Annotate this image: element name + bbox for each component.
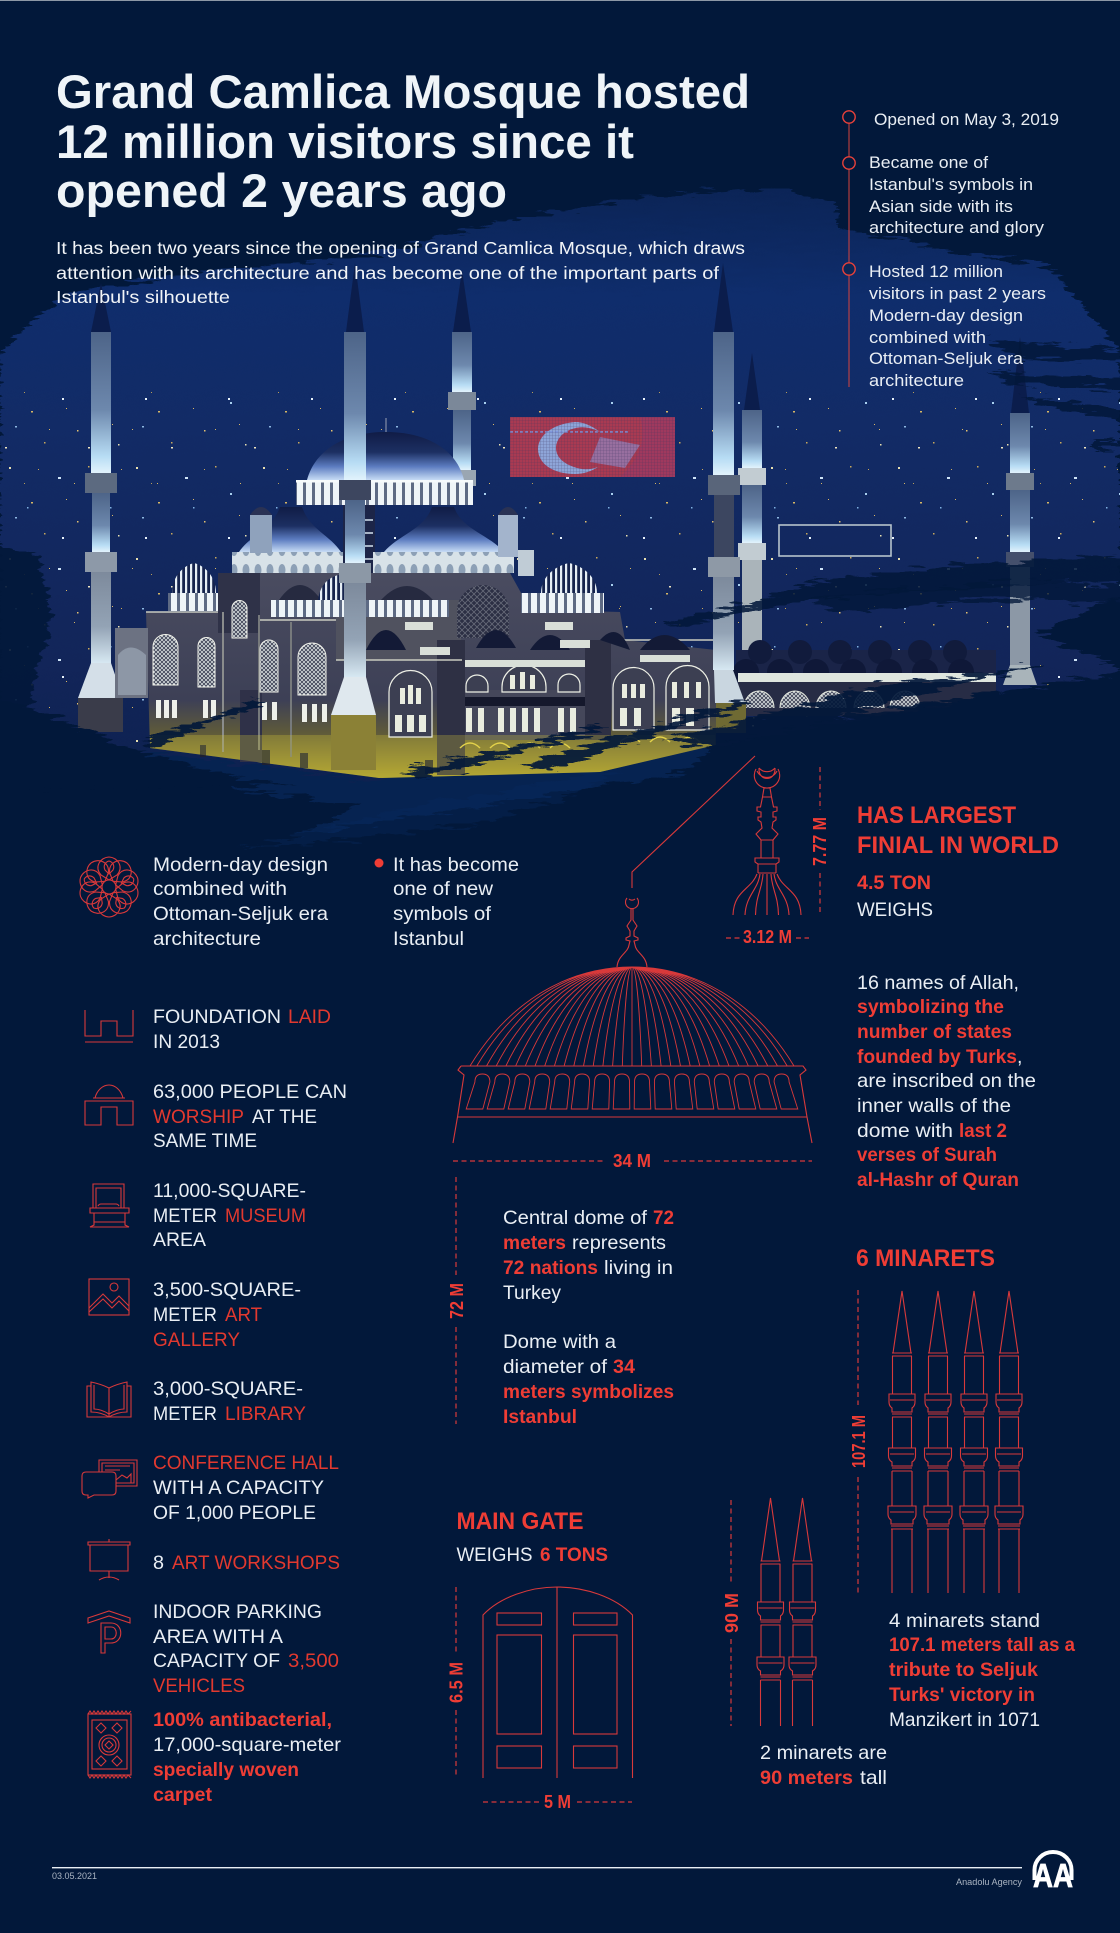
text: carpet: 17,000-square-meter <box>153 1734 342 1756</box>
text: library: 3,000-SQUARE- <box>153 1378 303 1400</box>
text: central dome meaning: 72 <box>653 1207 674 1229</box>
text: museum: 11,000-SQUARE- <box>153 1180 306 1202</box>
gate weight: 6 TONS <box>540 1544 608 1566</box>
timeline line and markers <box>843 111 855 387</box>
text: carpet <box>153 1709 342 1806</box>
bullet: new symbol of Istanbul: Istanbul <box>393 928 464 950</box>
text: four minarets: 107.1 meters tall as a <box>889 1634 1075 1656</box>
finial weight: 4.5 TON <box>857 872 931 894</box>
panel: main gate <box>446 1508 632 1812</box>
fact: symbol: Asian side with its <box>869 197 1013 216</box>
diagram: enlarged finial <box>733 768 801 915</box>
diagram: two minarets <box>757 1498 816 1726</box>
icon: foundation <box>85 1010 133 1042</box>
text: two minarets: 2 minarets are <box>760 1742 887 1764</box>
text: central dome meaning: Turkey <box>503 1282 561 1304</box>
finial weight: WEIGHS <box>857 899 933 921</box>
text: names of Allah: inner walls of the <box>857 1095 1011 1117</box>
central dome and drums <box>168 418 690 667</box>
heading: main gate: MAIN GATE <box>456 1508 584 1535</box>
text: art gallery: ART <box>225 1304 262 1326</box>
text: central dome meaning: Dome with a <box>503 1331 616 1353</box>
text: art gallery <box>153 1279 301 1351</box>
fact: symbol: architecture and glory <box>869 218 1045 237</box>
text: central dome meaning: 34 <box>613 1356 635 1378</box>
text: four minarets: Manzikert in 1071 <box>889 1709 1040 1731</box>
text: art gallery: METER <box>153 1304 217 1326</box>
dome finial <box>617 898 647 967</box>
text: names of Allah: number of states <box>857 1021 1012 1043</box>
dimension: 6.5 M: 6.5 M <box>446 1662 466 1703</box>
text: four minarets: Turks' victory in <box>889 1684 1035 1706</box>
text: four minarets: 4 minarets stand <box>889 1610 1040 1632</box>
front minarets <box>331 263 746 770</box>
dimension: 34 M: 34 M <box>613 1151 651 1171</box>
mosque main body <box>115 573 716 778</box>
text: design: combined with <box>153 878 287 900</box>
text: names of Allah: verses of Surah <box>857 1144 997 1166</box>
panel: largest finial text <box>857 802 1059 1191</box>
text: central dome meaning: meters symbolizes <box>503 1381 674 1403</box>
bullet: new symbol of Istanbul: symbols of <box>393 903 492 925</box>
text: names of Allah: al-Hashr of Quran <box>857 1169 1019 1191</box>
fact: visitors <box>869 262 1046 390</box>
drum windows <box>466 1074 798 1109</box>
dimension: 3.12 M <box>726 927 809 947</box>
text: worship <box>153 1081 347 1152</box>
text: names of Allah: 16 names of Allah, <box>857 972 1019 994</box>
text: names of Allah: last 2 <box>959 1120 1007 1142</box>
text: workshops: ART WORKSHOPS <box>172 1552 340 1574</box>
fact: symbol: Became one of <box>869 153 988 172</box>
text: foundation: LAID <box>288 1006 331 1028</box>
gate weight: WEIGHS <box>456 1544 532 1566</box>
text: names of Allah: are inscribed on the <box>857 1070 1036 1092</box>
dimension: 90 M: 90 M <box>722 1593 742 1633</box>
bullet: new symbol of Istanbul: It has become <box>393 854 519 876</box>
text: conference hall <box>153 1452 339 1524</box>
dimension: 72 M: 72 M <box>447 1283 467 1319</box>
text: central dome meaning: Istanbul <box>503 1406 577 1428</box>
icon: conference hall <box>82 1460 137 1498</box>
text: central dome meaning: diameter of <box>503 1356 608 1378</box>
text: four minarets <box>889 1610 1075 1731</box>
panel: left feature list <box>77 854 347 1806</box>
text: museum: AREA <box>153 1229 206 1251</box>
text: names of Allah: dome with <box>857 1120 953 1142</box>
title: opened 2 years ago <box>56 164 507 217</box>
fact: opened: Opened on May 3, 2019 <box>874 110 1059 129</box>
text: museum: METER <box>153 1205 217 1227</box>
text: central dome meaning: meters <box>503 1232 566 1254</box>
text: museum <box>153 1180 306 1251</box>
icon: art gallery <box>89 1279 129 1315</box>
dimension: 3.12 M: 3.12 M <box>743 927 792 947</box>
text: worship: AT THE <box>252 1106 317 1128</box>
Turkish flag display <box>510 417 675 477</box>
text: foundation: FOUNDATION <box>153 1006 281 1028</box>
fact: symbol: Istanbul's symbols in <box>869 175 1033 194</box>
text: design: Modern-day design <box>153 854 328 876</box>
finial weight <box>857 872 933 921</box>
logo: Anadolu Agency: AA <box>1033 1857 1073 1894</box>
fact: visitors: combined with <box>869 328 986 347</box>
text: library <box>153 1378 306 1425</box>
text: parking: CAPACITY OF <box>153 1650 280 1672</box>
text: names of Allah <box>857 972 1036 1191</box>
text: art gallery: 3,500-SQUARE- <box>153 1279 301 1301</box>
rear minarets <box>78 270 1037 732</box>
text: worship: SAME TIME <box>153 1130 257 1152</box>
arched facade windows <box>389 665 709 737</box>
heading: largest finial: FINIAL IN WORLD <box>857 832 1059 859</box>
text: central dome meaning: living in <box>604 1257 673 1279</box>
icon: projection screen <box>88 1539 130 1580</box>
text: library: METER <box>153 1403 217 1425</box>
top edge line <box>0 0 1120 1</box>
text: two minarets: tall <box>860 1767 887 1789</box>
title <box>56 65 750 217</box>
heading: 6 minarets: 6 MINARETS <box>856 1245 995 1272</box>
text: parking: VEHICLES <box>153 1675 245 1697</box>
arched lattice windows <box>153 585 509 722</box>
text: carpet: 100% antibacterial, <box>153 1709 332 1731</box>
icon: carpet <box>88 1711 131 1778</box>
icon: parking <box>88 1611 130 1653</box>
text: museum: MUSEUM <box>225 1205 306 1227</box>
dimension: 5 M: 5 M <box>544 1792 571 1812</box>
text: design: architecture <box>153 928 261 950</box>
text: foundation: IN 2013 <box>153 1031 220 1053</box>
text: two minarets: 90 meters <box>760 1767 853 1789</box>
text: carpet: carpet <box>153 1784 213 1806</box>
intro paragraph <box>56 238 745 307</box>
dome ribs <box>470 967 794 1066</box>
icon: worship <box>85 1085 133 1125</box>
heading: largest finial: HAS LARGEST <box>857 802 1016 829</box>
date: 03.05.2021 <box>52 1871 97 1881</box>
diagram: gate doors <box>483 1587 632 1778</box>
intro paragraph: attention with its architecture and has become one of the important parts of <box>56 263 719 283</box>
icon: rosette <box>77 856 141 918</box>
title: 12 million visitors since it <box>56 115 634 168</box>
text: central dome meaning: Central dome of <box>503 1207 648 1229</box>
text: parking <box>153 1601 339 1697</box>
footer rule <box>52 1867 1022 1868</box>
text: parking: 3,500 <box>288 1650 339 1672</box>
text: conference hall: OF 1,000 PEOPLE <box>153 1502 316 1524</box>
title: Grand Camlica Mosque hosted <box>56 65 750 118</box>
intro paragraph: Istanbul's silhouette <box>56 287 230 307</box>
fact: visitors: Hosted 12 million <box>869 262 1003 281</box>
diagram: four minarets <box>888 1291 1023 1593</box>
text: worship: 63,000 PEOPLE CAN <box>153 1081 347 1103</box>
text: names of Allah: symbolizing the <box>857 996 1004 1018</box>
text: four minarets: tribute to Seljuk <box>889 1659 1038 1681</box>
right arcade wing <box>733 640 996 716</box>
fact: visitors: Modern-day design <box>869 306 1023 325</box>
fact: visitors: architecture <box>869 371 964 390</box>
icon: library book <box>87 1382 131 1417</box>
text: conference hall: WITH A CAPACITY <box>153 1477 324 1499</box>
gate weight <box>456 1544 608 1566</box>
lit billboard outline <box>779 525 891 556</box>
source credit: Anadolu Agency <box>956 1877 1022 1888</box>
lit arcade windows <box>395 672 701 732</box>
footer <box>52 1852 1073 1894</box>
fact: symbol <box>869 153 1045 237</box>
text: names of Allah: founded by Turks <box>857 1046 1017 1068</box>
text: art gallery: GALLERY <box>153 1329 240 1351</box>
fact: visitors: visitors in past 2 years <box>869 284 1046 303</box>
diagram: central dome <box>453 898 812 1143</box>
text: parking: AREA WITH A <box>153 1626 283 1648</box>
text: central dome meaning: 72 nations <box>503 1257 598 1279</box>
text: two minarets <box>760 1742 887 1789</box>
text: carpet: specially woven <box>153 1759 299 1781</box>
text: parking: INDOOR PARKING <box>153 1601 322 1623</box>
dimension: 107.1 M: 107.1 M <box>849 1415 869 1468</box>
faded blue brush under the photo <box>90 715 760 850</box>
dome drum and base <box>453 1066 812 1143</box>
text: names of Allah: , <box>1017 1046 1022 1068</box>
bullet: new symbol of Istanbul: one of new <box>393 878 494 900</box>
icon: museum display <box>90 1184 129 1227</box>
text: worship: WORSHIP <box>153 1106 244 1128</box>
bullet: new symbol of Istanbul <box>374 854 519 950</box>
text: library: LIBRARY <box>225 1403 306 1425</box>
text: foundation <box>153 1006 331 1053</box>
text: central dome meaning: represents <box>572 1232 666 1254</box>
dark brush strokes over photo <box>0 340 1120 790</box>
text: design: Ottoman-Seljuk era <box>153 903 328 925</box>
text: conference hall: CONFERENCE HALL <box>153 1452 339 1474</box>
leader line from dome finial to enlarged finial <box>632 756 755 888</box>
panel: six minarets <box>722 1245 1075 1789</box>
heading: largest finial <box>857 802 1059 859</box>
fact: visitors: Ottoman-Seljuk era <box>869 349 1024 368</box>
city lights <box>0 388 1120 772</box>
night sky brush <box>0 188 1120 782</box>
intro paragraph: It has been two years since the opening of Grand Camlica Mosque, which draws <box>56 238 745 258</box>
photo: Grand Camlica Mosque at night <box>0 188 1120 850</box>
text: design <box>153 854 328 950</box>
text: workshops: 8 <box>153 1552 164 1574</box>
dimension: 7.77 M: 7.77 M <box>810 817 830 866</box>
text: central dome meaning <box>503 1207 674 1428</box>
panel: key facts timeline <box>843 110 1059 390</box>
